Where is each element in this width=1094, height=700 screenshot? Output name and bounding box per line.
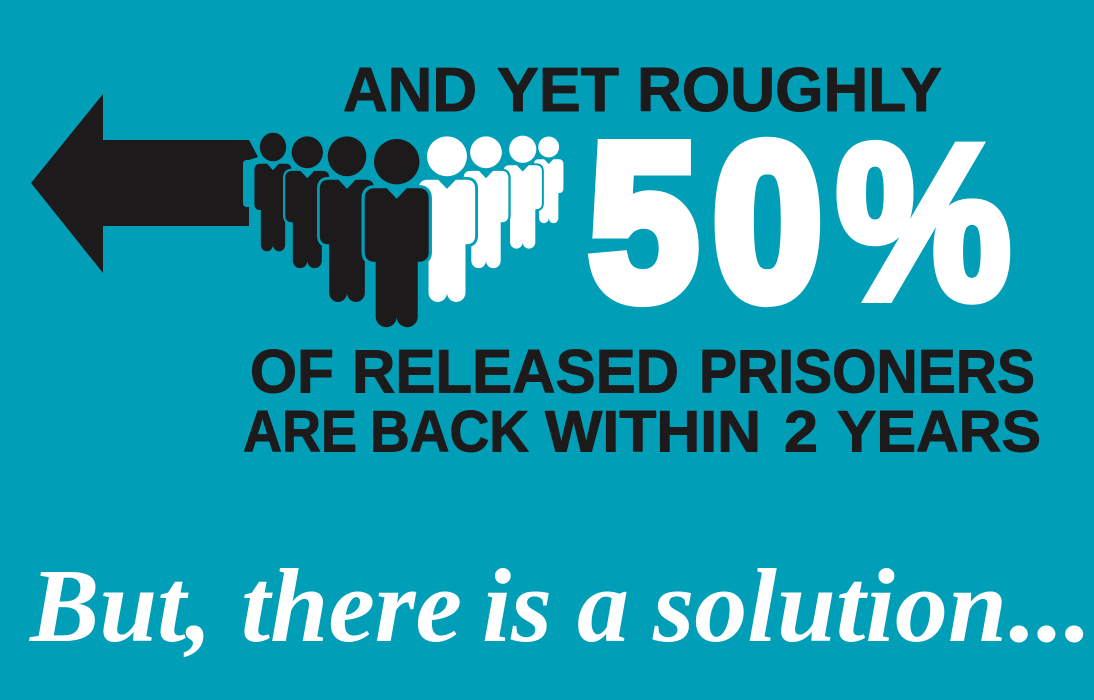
closing line: but there is a solution: is [482,547,552,664]
subheading: are back within 2 years: 2 [784,400,818,464]
subheading: of released prisoners: OF [250,338,334,406]
icon: black person 4 [365,139,429,327]
icon: white person 1 [419,136,475,302]
subheading: of released prisoners [250,338,1035,406]
icon: black person 2 [285,136,329,268]
arrow pointing left [31,94,258,273]
subheading: are back within 2 years: WITHIN [545,400,761,464]
heading: and yet roughly: YET [497,56,619,125]
big number: 50 percent: 5 [589,98,698,345]
closing line: but there is a solution: a [577,547,629,664]
big number: 50 percent: 0 [713,98,822,345]
big number: 50 percent: % [836,99,1011,345]
people row: half white, half black [254,133,563,327]
closing line: but there is a solution: But, [29,547,212,664]
subheading: are back within 2 years: ARE [243,400,357,464]
big number: 50 percent [589,98,1011,345]
closing line: but there is a solution: solution [652,547,1007,664]
heading: and yet roughly [343,56,942,125]
icon: black person 3 [320,136,374,302]
closing line: but there is a solution: ... [1009,547,1092,664]
icon: white person 3 [504,136,542,249]
icon: white person 2 [464,136,508,268]
heading: and yet roughly: AND [343,56,477,125]
subheading: are back within 2 years [243,400,1041,464]
subheading: are back within 2 years: YEARS [837,400,1041,464]
subheading: of released prisoners: RELEASED [352,338,679,406]
closing line: but there is a solution [29,547,1092,664]
subheading: of released prisoners: PRISONERS [699,338,1035,406]
subheading: are back within 2 years: BACK [370,400,529,464]
heading: and yet roughly: ROUGHLY [637,56,942,125]
icon: white person 4 [534,137,563,223]
icon: black person 1 [254,133,292,251]
closing line: but there is a solution: there [241,547,462,664]
